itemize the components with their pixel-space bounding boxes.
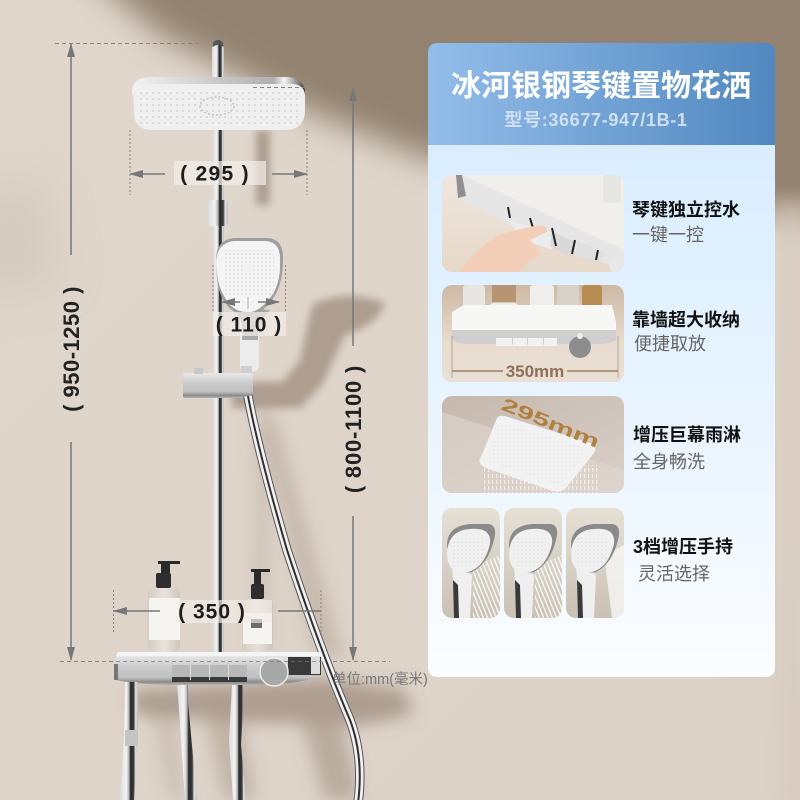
feature text: hand shower: 灵活选择 [638, 564, 710, 584]
dimension: total height 950-1250: ( 950-1250 ) [59, 286, 84, 412]
dimension: rain head width 295: ( 295 ) [180, 162, 250, 186]
rail bracket [208, 200, 228, 226]
feature photo: spray mode 3 [566, 508, 624, 618]
dimension: hand shower width 110: ( 110 ) [216, 314, 282, 336]
thermostatic shelf body [114, 652, 322, 686]
sliding holder [183, 368, 253, 398]
feature photo: spray mode 1 [442, 508, 500, 618]
dimension: shelf width 350 [114, 590, 321, 632]
feature photo: wall storage shelf [442, 285, 624, 382]
model number: 型号:36677-947/1B-1 [504, 110, 688, 130]
dashed baseline overlay [116, 660, 322, 662]
feature text: rain head: 全身畅洗 [633, 452, 705, 472]
hose [248, 396, 360, 800]
feature text: hand shower: 3档增压手持 [633, 537, 733, 557]
panel header [428, 43, 775, 145]
panel: product features [428, 43, 775, 677]
feature text: rain head: 增压巨幕雨淋 [633, 425, 741, 445]
feature photo: wall storage shelf: 350mm [506, 362, 564, 381]
feature photo: piano keys [442, 175, 627, 274]
dimension: shelf width 350: ( 350 ) [178, 600, 246, 624]
feature photo: oversized rain head: 295mm [499, 394, 602, 452]
dimension: spout height 800-1100: ( 800-1100 ) [341, 365, 366, 493]
feature photo: spray mode 2 [504, 508, 562, 618]
dimension: hand shower width 110 [213, 265, 286, 336]
dimension: rain head width 295 [130, 130, 307, 195]
rain shower head [132, 77, 305, 130]
feature text: wall storage: 靠墙超大收纳 [632, 310, 740, 330]
feature text: hand shower [633, 537, 733, 584]
feature text: wall storage [632, 310, 740, 354]
product title: 冰河银钢琴键置物花洒 [451, 70, 751, 103]
shelf bottle: left [148, 561, 180, 652]
lower inlet pipes [120, 682, 246, 800]
feature text: wall storage: 便捷取放 [634, 334, 706, 354]
feature photo: oversized rain head [442, 394, 624, 493]
feature text: piano keys [632, 199, 740, 245]
feature text: rain head [633, 425, 741, 472]
feature text: piano keys: 一键一控 [632, 225, 704, 245]
hand shower [216, 238, 283, 375]
panel body [428, 140, 775, 677]
unit note: 单位:mm(毫米) [332, 670, 428, 688]
shelf bottle: right [242, 569, 273, 652]
feature text: piano keys: 琴键独立控水 [632, 199, 740, 220]
slide rail and gooseneck [212, 40, 224, 660]
